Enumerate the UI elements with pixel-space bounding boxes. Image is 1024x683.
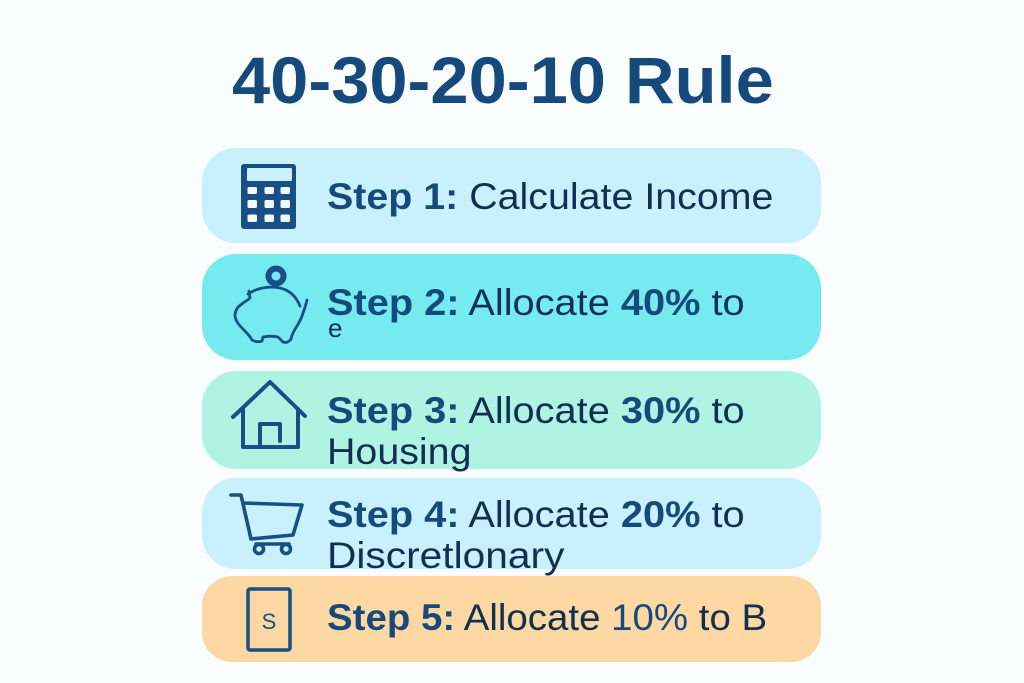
icon: phone with S: S	[262, 609, 276, 634]
step 3 second line: Housing	[327, 430, 471, 472]
panel: step 3	[202, 371, 821, 469]
title: 40-30-20-10 Rule	[232, 43, 774, 117]
step 4 second line: Discretlonary	[327, 534, 564, 576]
panel: step 5	[202, 576, 821, 662]
panel: step 4	[202, 478, 821, 569]
step 4 text: Step 4: Allocate 20% to	[327, 493, 745, 535]
step 2 stray letter: e	[328, 313, 342, 343]
panel: step 2	[202, 254, 821, 360]
step 5 text: Step 5: Allocate 10% to B	[327, 596, 767, 638]
step 1 text: Step 1: Calculate Income	[327, 175, 773, 217]
step 2 text: Step 2: Allocate 40% to	[327, 281, 745, 323]
step 3 text: Step 3: Allocate 30% to	[327, 389, 745, 431]
panel: step 1	[202, 148, 821, 243]
